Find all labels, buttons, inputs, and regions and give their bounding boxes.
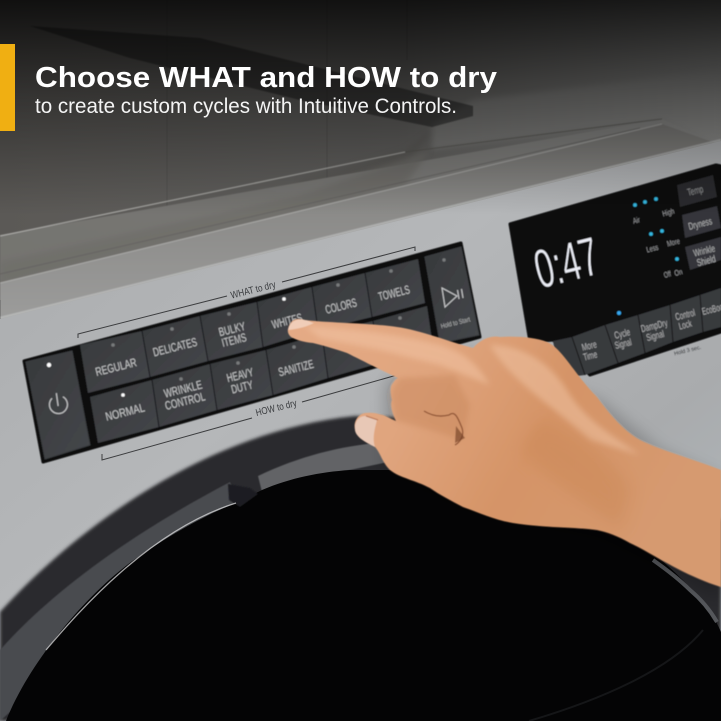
status indicators: Less (645, 243, 659, 254)
WHAT to dry buttons row: REGULAR (94, 355, 138, 379)
dryer top plate (0, 119, 721, 325)
option buttons row: Hold 3 sec. (674, 345, 702, 357)
option buttons row: DampDry (640, 318, 669, 335)
panel bezel (24, 243, 480, 462)
hand highlights and shading (305, 326, 640, 530)
time readout: 0:47 (528, 225, 605, 300)
door trim and glass (0, 416, 721, 721)
top dark gradient overlay (0, 0, 721, 215)
black door glass (6, 470, 721, 721)
outer dark trim (0, 416, 721, 721)
status indicators: Air (632, 215, 641, 226)
status indicators: Off (663, 269, 672, 280)
fingernails (288, 319, 378, 447)
HOW to dry buttons row (90, 306, 433, 443)
hand shadow (385, 352, 721, 600)
WHAT to dry buttons row: ITEMS (220, 330, 248, 350)
status indicators: On (673, 267, 683, 278)
HOW to dry buttons row: CONTROL (163, 389, 207, 413)
WHAT to dry buttons row: BULKY (217, 319, 247, 339)
option buttons row: More (581, 339, 598, 354)
option buttons column: Temp (686, 184, 705, 199)
option buttons row: Signal (645, 329, 665, 344)
main control panel (24, 243, 480, 462)
power button (26, 351, 90, 459)
option buttons row: Cycle (613, 327, 632, 342)
option buttons row: Time (582, 349, 599, 364)
hand silhouette (288, 319, 721, 587)
WHAT to dry buttons row: DELICATES (152, 335, 199, 359)
hand pressing button (288, 319, 721, 600)
start pause button: Hold to Start (440, 317, 471, 331)
HOW to dry label with bracket: HOW to dry (255, 398, 298, 419)
grey bezel band (0, 482, 240, 721)
option buttons row: Signal (614, 337, 633, 352)
WHAT to dry buttons row: TOWELS (377, 282, 411, 304)
subheading: to create custom cycles with Intuitive Controls. (35, 95, 457, 118)
HOW to dry label with bracket (102, 375, 397, 460)
WHAT to dry buttons row: WHITES (270, 311, 304, 332)
WHAT to dry buttons row: COLORS (324, 295, 358, 317)
option buttons row: Lock (678, 319, 694, 332)
start pause button (425, 247, 479, 343)
bezel notch (228, 484, 258, 507)
option buttons row: Control (674, 308, 696, 323)
status indicators (617, 197, 683, 315)
display and options panel (510, 165, 721, 378)
HOW to dry buttons row: NORMAL (104, 400, 146, 424)
heading: Choose WHAT and HOW to dry (35, 62, 497, 94)
WHAT to dry label with bracket: WHAT to dry (230, 280, 277, 301)
status indicators: High (661, 207, 675, 218)
HOW to dry buttons row: WRINKLE (162, 378, 204, 401)
HOW to dry buttons row: SANITIZE (277, 357, 315, 379)
WHAT to dry label with bracket (78, 247, 415, 338)
wall and countertop background (0, 0, 721, 300)
option buttons row (553, 288, 721, 378)
status indicators: More (666, 237, 681, 249)
black display (510, 165, 721, 375)
HOW to dry buttons row: DUTY (230, 378, 254, 397)
yellow accent bar (0, 44, 15, 131)
HOW to dry buttons row: HEAVY (225, 365, 255, 385)
WHAT to dry buttons row (80, 259, 425, 393)
option buttons column (677, 175, 721, 270)
